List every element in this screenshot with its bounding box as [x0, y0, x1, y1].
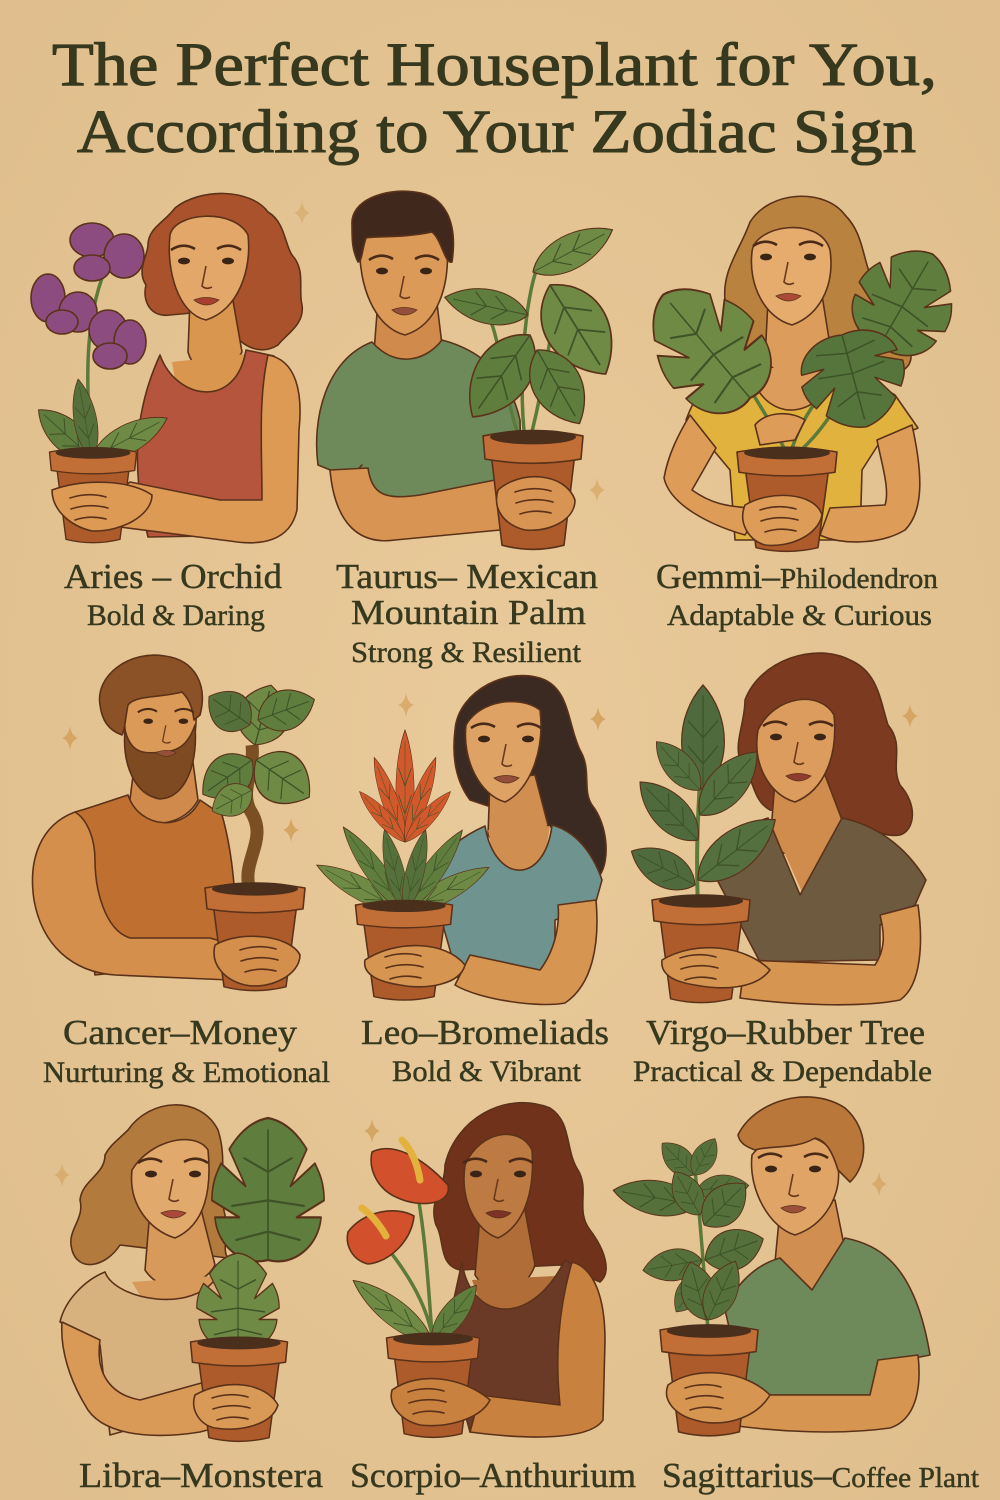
caption: Aries: [64, 557, 283, 632]
sparkle: [589, 478, 605, 502]
caption: Aries: Aries – Orchid: [64, 557, 283, 596]
plant: [441, 215, 632, 440]
sparkle: [294, 201, 310, 225]
caption: Cancer: Nurturing & Emotional: [43, 1056, 330, 1089]
title: [52, 32, 937, 166]
sparkle: [590, 707, 606, 731]
caption: Gemini: [656, 557, 938, 632]
sparkle: [398, 693, 414, 717]
pot: [652, 894, 750, 1003]
caption: Leo: Bold & Vibrant: [392, 1055, 582, 1088]
figure: Gemini with Philodendron: [623, 196, 975, 551]
caption: Taurus: Taurus– Mexican: [336, 557, 598, 596]
pot: [737, 446, 837, 551]
sparkle: [871, 1172, 887, 1196]
figure: Taurus with Mexican Mountain Palm: [317, 191, 632, 549]
sparkle: [283, 818, 299, 842]
figure: Virgo with Rubber Tree: [623, 653, 926, 1005]
pot: [356, 900, 452, 1000]
philodendron: [623, 229, 975, 455]
figure: Sagittarius with Coffee Plant: [610, 1097, 930, 1436]
figure: Aries with orchid: [28, 193, 302, 543]
pot: [205, 882, 305, 991]
caption: Taurus: Strong & Resilient: [351, 636, 582, 669]
caption: Cancer: Cancer–Money: [63, 1013, 298, 1052]
pot: [660, 1324, 758, 1436]
sparkle: [62, 726, 78, 750]
coffee plant: [610, 1133, 770, 1332]
caption: Virgo: Virgo–Rubber Tree: [646, 1013, 925, 1052]
caption: Gemini: Gemmi–Philodendron: [656, 557, 938, 596]
caption: Virgo: [633, 1013, 932, 1088]
rubber tree: [623, 685, 788, 905]
sparkle: [364, 1119, 380, 1143]
sparkle: [902, 704, 918, 728]
caption: Leo: [361, 1013, 609, 1088]
caption: Cancer: [43, 1013, 330, 1089]
caption: Taurus: [336, 557, 598, 669]
figure: Leo with Bromeliad: [311, 676, 606, 1004]
monstera: [197, 1118, 324, 1349]
pot: [190, 1336, 288, 1441]
caption: Gemini: Adaptable & Curious: [667, 599, 932, 632]
pot: [386, 1332, 480, 1437]
caption: Libra: Libra–Monstera: [79, 1456, 324, 1495]
sparkle: [54, 1163, 70, 1187]
caption: Virgo: Practical & Dependable: [633, 1055, 932, 1088]
figure: Scorpio with Anthurium: [345, 1103, 606, 1437]
pot: [50, 447, 136, 543]
money tree: [191, 678, 324, 890]
anthurium: [345, 1140, 486, 1352]
title: According to Your Zodiac Sign: [77, 99, 916, 166]
orchid: [28, 223, 174, 471]
figure: Libra with Monstera: [60, 1105, 324, 1441]
title: The Perfect Houseplant for You,: [52, 32, 937, 99]
caption: Taurus: Mountain Palm: [351, 593, 586, 632]
figure: Cancer with Money tree: [33, 655, 324, 991]
pot: [483, 430, 583, 549]
bromeliad: [311, 730, 494, 922]
caption: Leo: Leo–Bromeliads: [361, 1013, 609, 1052]
caption: Scorpio: Scorpio–Anthurium: [350, 1456, 636, 1495]
caption: Aries: Bold & Daring: [87, 599, 265, 632]
caption: Sagittarius: Sagittarius–Coffee Plant: [662, 1456, 979, 1495]
